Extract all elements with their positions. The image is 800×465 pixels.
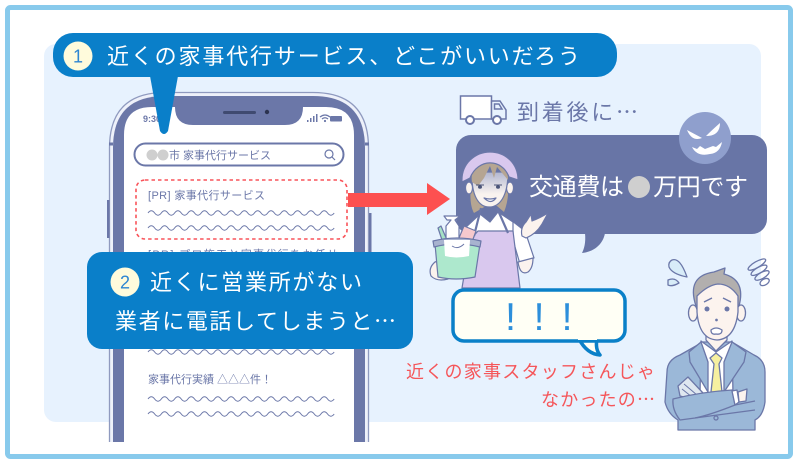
search bar (134, 144, 344, 166)
right arm and sleeve (507, 217, 534, 264)
suit jacket (665, 342, 765, 430)
surprise speech bubble: ! (505, 296, 516, 339)
icon: angry face (679, 112, 731, 164)
icon: truck (460, 96, 506, 124)
bottles (444, 216, 460, 240)
callout 1: heading bubble (53, 33, 617, 134)
cloth in bucket (444, 240, 470, 258)
tie (710, 353, 722, 392)
lapels (689, 342, 746, 392)
face (697, 284, 738, 340)
neck (706, 328, 727, 351)
callout 1: heading bubble: 1 (73, 46, 83, 66)
callout 2: 業者に電話してしまうと… (115, 304, 396, 336)
apron (462, 231, 520, 288)
shirt (700, 341, 733, 395)
hair (693, 268, 741, 306)
illustration: cleaning staff woman (430, 152, 548, 288)
hand with fingers (678, 377, 703, 400)
surprise speech bubble: ! (534, 296, 544, 339)
red arrow (348, 183, 450, 215)
staff speech bubble: 交通費は (529, 174, 624, 201)
search result: second ad (148, 247, 338, 354)
shirt (465, 212, 513, 238)
callout 2 (87, 252, 413, 349)
callout 2: 2 (120, 272, 130, 292)
search result: track record (148, 372, 334, 416)
text: customer thought (406, 362, 655, 412)
smartphone (107, 92, 372, 442)
surprise speech bubble (453, 290, 625, 355)
search result: second ad: [PR] プロ施工と家事代行をお任せ (148, 247, 338, 261)
kerchief (462, 152, 518, 182)
face (466, 182, 472, 194)
hair back (470, 175, 508, 213)
hair front (472, 161, 508, 186)
staff speech bubble: 万円です (653, 174, 748, 201)
bucket (435, 244, 480, 279)
man eyes and brows (704, 298, 731, 302)
search result: PR ad: [PR] 家事代行サービス (148, 188, 265, 202)
left hand (430, 258, 448, 280)
search bar: 市 家事代行サービス (169, 148, 271, 162)
icon: sweat drops (668, 260, 687, 286)
background panel (44, 44, 761, 422)
icon: worry spiral (747, 257, 777, 289)
search result: track record: 家事代行実績 △△△件！ (148, 372, 272, 386)
text: after arrival: 到着後に… (517, 95, 638, 127)
text: customer thought: 近くの家事スタッフさんじゃ (406, 362, 655, 382)
illustration: worried man (665, 257, 777, 430)
text: customer thought: なかったの… (541, 386, 655, 412)
callout 2: 近くに営業所がない (150, 270, 362, 295)
callout 1: heading bubble: 近くの家事代行サービス、どこがいいだろう (107, 44, 580, 69)
phone speaker and camera (223, 110, 269, 114)
status bar: 9:30 (143, 114, 161, 124)
ears (688, 305, 698, 321)
search result: PR ad (136, 180, 347, 239)
woman eyes and mouth (476, 184, 502, 186)
crossed arms (673, 390, 735, 420)
surprise speech bubble: ! (562, 296, 572, 339)
status bar (143, 114, 342, 124)
staff speech bubble (456, 112, 767, 253)
